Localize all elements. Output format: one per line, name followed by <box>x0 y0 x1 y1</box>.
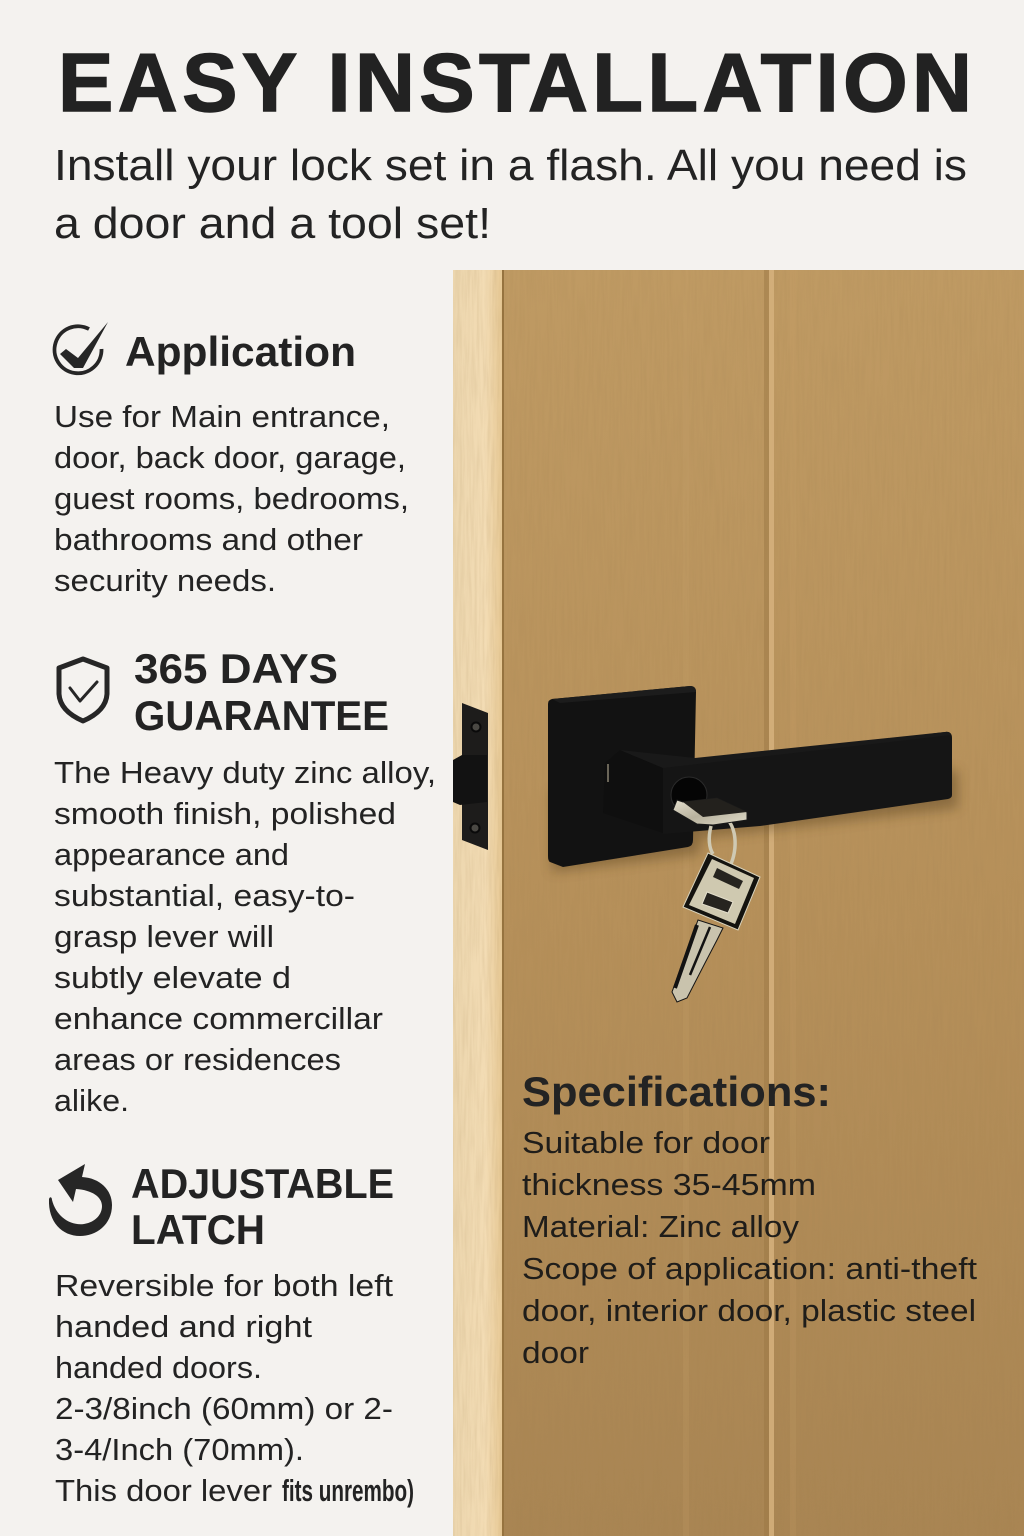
icon: check circle <box>55 322 108 373</box>
guarantee text: areas or residences <box>54 1042 341 1077</box>
specifications text: Material: Zinc alloy <box>522 1209 800 1244</box>
specifications text <box>522 1125 977 1370</box>
section: adjustable latch <box>49 1160 414 1508</box>
latch text: fits unrembo) <box>282 1473 414 1508</box>
specifications text: Scope of application: anti-theft <box>522 1251 977 1286</box>
subtitle: Install your lock set in a flash. All you need is <box>54 141 967 190</box>
wood grain <box>453 270 1024 1536</box>
application text: guest rooms, bedrooms, <box>54 481 409 516</box>
section: application <box>54 322 409 598</box>
latch text: This door lever <box>55 1473 272 1508</box>
guarantee text: alike. <box>54 1083 129 1118</box>
door edge <box>453 270 503 1536</box>
lever shadow <box>552 770 958 872</box>
lever arm <box>620 732 952 834</box>
heading: adjustable latch: ADJUSTABLE <box>131 1160 394 1207</box>
guarantee text: appearance and <box>54 837 289 872</box>
key <box>672 798 760 1002</box>
latch bolt <box>453 755 487 805</box>
application text: Use for Main entrance, <box>54 399 390 434</box>
specifications text: door <box>522 1335 589 1370</box>
heading: specifications: Specifications: <box>522 1068 831 1115</box>
rose plate <box>548 686 696 867</box>
heading: application: Application <box>125 328 356 375</box>
title: EASY INSTALLATION <box>58 36 972 129</box>
guarantee text: enhance commercillar <box>54 1001 383 1036</box>
key bit in lock <box>673 798 747 825</box>
heading: adjustable latch: LATCH <box>131 1206 265 1253</box>
application text: door, back door, garage, <box>54 440 406 475</box>
guarantee text: substantial, easy-to- <box>54 878 355 913</box>
panel: door <box>453 270 1024 1536</box>
subtitle: a door and a tool set! <box>54 199 491 248</box>
guarantee text: smooth finish, polished <box>54 796 396 831</box>
door grooves <box>502 270 796 1536</box>
application text <box>54 399 409 598</box>
specifications text: Suitable for door <box>522 1125 770 1160</box>
latch text: 2-3/8inch (60mm) or 2- <box>55 1391 393 1426</box>
specifications text: door, interior door, plastic steel <box>522 1293 976 1328</box>
door face <box>503 270 1024 1536</box>
heading: guarantee: 365 DAYS <box>134 645 338 692</box>
heading: guarantee: GUARANTEE <box>134 692 389 739</box>
key head <box>683 853 760 930</box>
guarantee text: The Heavy duty zinc alloy, <box>54 755 436 790</box>
key blade <box>672 920 723 1002</box>
specifications text: thickness 35-45mm <box>522 1167 816 1202</box>
latch text: 3-4/Inch (70mm). <box>55 1432 304 1467</box>
latch plate <box>453 703 488 850</box>
latch text: handed doors. <box>55 1350 262 1385</box>
heading: guarantee <box>134 645 389 739</box>
application text: security needs. <box>54 563 276 598</box>
latch text <box>55 1268 414 1508</box>
guarantee text: grasp lever will <box>54 919 274 954</box>
heading: adjustable latch <box>131 1160 394 1253</box>
latch text: Reversible for both left <box>55 1268 393 1303</box>
door lever handle <box>548 686 952 867</box>
section: guarantee <box>54 645 436 1118</box>
subtitle <box>54 141 967 248</box>
application text: bathrooms and other <box>54 522 363 557</box>
guarantee text: subtly elevate d <box>54 960 291 995</box>
section: specifications <box>522 1068 977 1370</box>
neck <box>603 750 663 833</box>
latch text: handed and right <box>55 1309 312 1344</box>
guarantee text <box>54 755 436 1118</box>
keyhole <box>671 777 707 813</box>
icon: shield <box>59 659 107 721</box>
icon: rotate arrow <box>49 1164 112 1236</box>
key ring <box>709 814 735 866</box>
